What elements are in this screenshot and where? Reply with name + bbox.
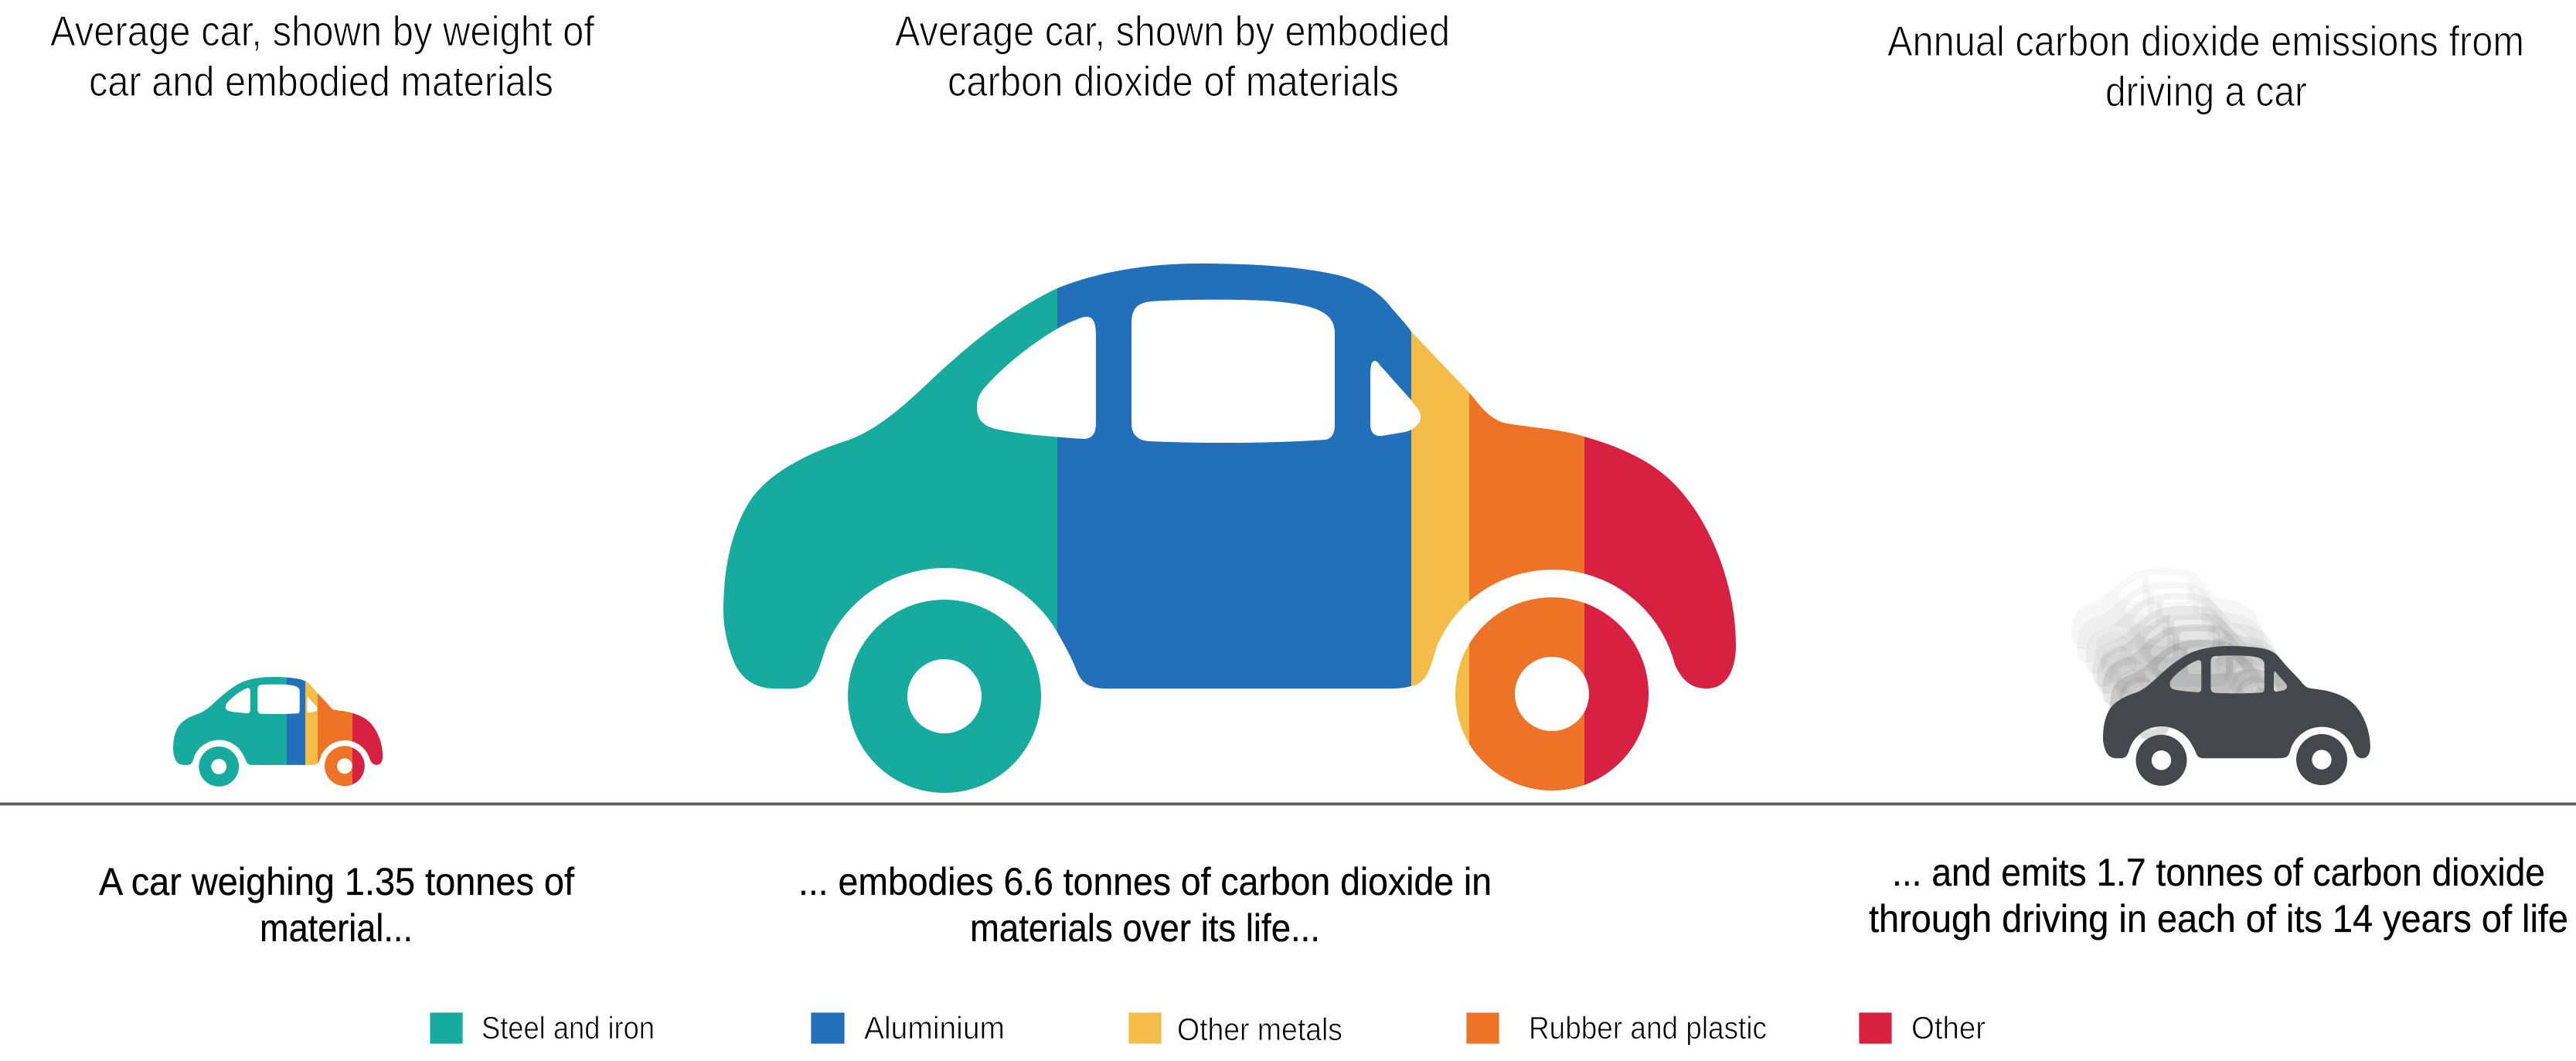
caption: car weight: material... (260, 906, 413, 950)
icon: dark car with fading trail of emissions (2071, 568, 2370, 786)
legend item: rubber and plastic: Rubber and plastic (1529, 1010, 1767, 1046)
heading: annual emissions column: driving a car (2105, 67, 2307, 115)
heading: annual emissions column (1887, 17, 2524, 115)
caption: car weight (99, 860, 574, 950)
heading: weight column (50, 7, 595, 105)
legend item: aluminium (811, 1010, 1005, 1046)
heading: embodied carbon column: carbon dioxide of materials (948, 57, 1399, 105)
legend (430, 1010, 1986, 1047)
icon: small car coloured by weight of materials (173, 677, 383, 787)
caption: embodied carbon dioxide: ... embodies 6.6 tonnes of carbon dioxide in (798, 860, 1492, 903)
heading: weight column: car and embodied materials (89, 57, 553, 105)
legend item: other: Other (1911, 1010, 1986, 1046)
caption: embodied carbon dioxide (798, 860, 1492, 950)
heading: weight column: Average car, shown by weight of (50, 7, 595, 55)
icon: large car coloured by embodied carbon dioxide (723, 264, 1736, 793)
heading: embodied carbon column: Average car, shown by embodied (895, 7, 1450, 55)
legend item: other metals: Other metals (1177, 1012, 1342, 1047)
caption: embodied carbon dioxide: materials over its life... (970, 906, 1320, 950)
legend item: other (1859, 1010, 1986, 1046)
caption: annual driving emissions (1869, 851, 2568, 940)
legend item: aluminium: Aluminium (864, 1010, 1005, 1046)
heading: embodied carbon column (895, 7, 1450, 105)
legend item: steel and iron: Steel and iron (482, 1010, 655, 1046)
caption: car weight: A car weighing 1.35 tonnes of (99, 860, 574, 903)
legend item: steel and iron (430, 1010, 655, 1046)
